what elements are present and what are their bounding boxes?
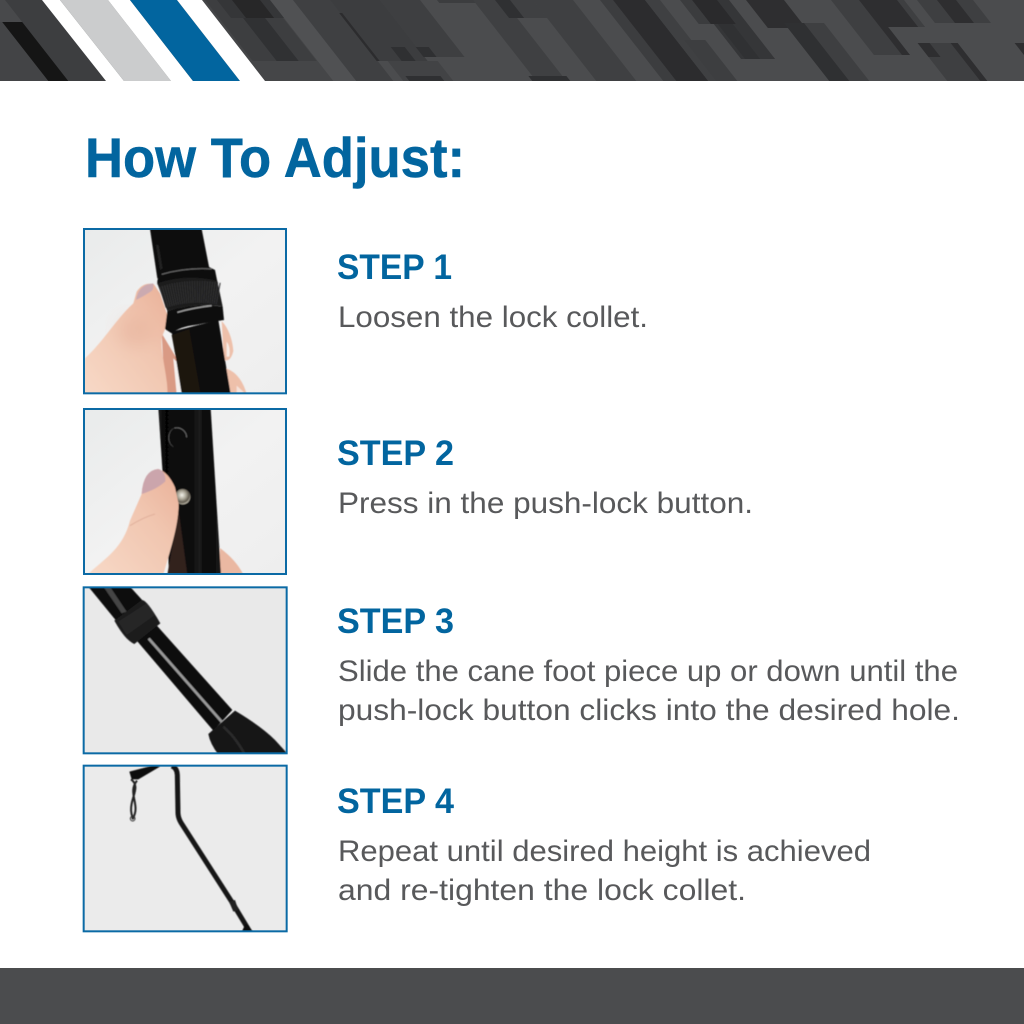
header stripes [42, 0, 265, 81]
step 1 heading: STEP 1 [337, 248, 452, 287]
step 4 heading: STEP 4 [337, 782, 455, 821]
step 4 photo border [84, 766, 287, 931]
panel: step 1 photo [83, 228, 287, 394]
panel: step 3 photo [83, 587, 288, 755]
step 2 photo border [84, 409, 286, 574]
step 4 text [338, 835, 871, 907]
step 3 text: Slide the cane foot piece up or down until the [338, 655, 958, 688]
step 1 text: Loosen the lock collet. [338, 301, 648, 334]
step 1 photo border [84, 229, 286, 393]
step 3 text: push-lock button clicks into the desired hole. [338, 694, 960, 727]
footer band [0, 968, 1024, 1024]
step 2 heading: STEP 2 [337, 434, 454, 473]
step 4 text: Repeat until desired height is achieved [338, 835, 871, 868]
step 3 heading: STEP 3 [337, 602, 454, 641]
panel: step 4 photo [83, 765, 287, 932]
title: How To Adjust: [85, 126, 465, 189]
step 2 text: Press in the push-lock button. [338, 487, 753, 520]
header band [0, 0, 1024, 81]
step 3 text [338, 655, 960, 727]
step 3 photo border [84, 587, 287, 753]
step 4 text: and re-tighten the lock collet. [338, 874, 746, 907]
panel: step 2 photo [83, 408, 287, 575]
